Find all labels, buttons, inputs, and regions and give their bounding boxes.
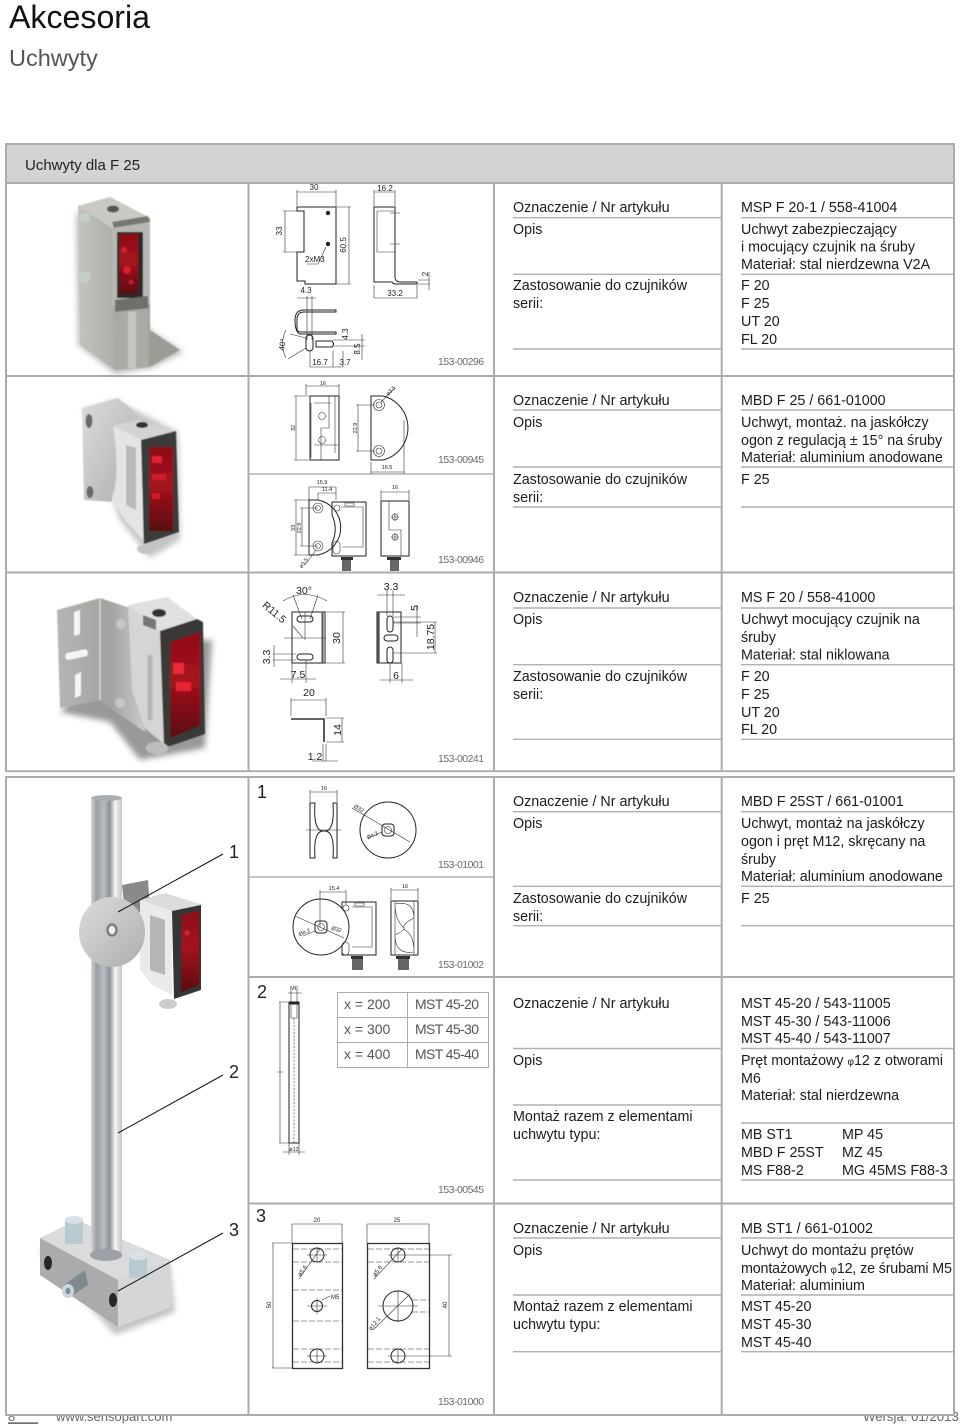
technical drawing 153-00296: 2xM3 [305, 255, 325, 264]
article number 153-00945: 153-00945 [438, 455, 484, 466]
technical drawing 153-00946: ø3.5 [299, 557, 310, 570]
details: MS F 20: Zastosowanie do czujników [513, 669, 688, 685]
technical drawing 153-01002: 16 [402, 884, 408, 890]
details: MSP F 20-1 [513, 200, 954, 349]
details: MBD F 25ST: F 25 [741, 891, 770, 907]
footer: 8 [8, 1409, 15, 1424]
article number 153-00296: 153-00296 [438, 357, 484, 368]
technical drawing 153-00241: 7.5 [291, 669, 305, 681]
technical drawing 153-01002: 15.4 [329, 886, 339, 892]
details: MS F 20: FL 20 [741, 722, 777, 738]
technical drawing 153-00545: rod: M6 [290, 986, 298, 992]
article number 153-01001: 153-01001 [438, 860, 484, 871]
details: MBD F 25ST: śruby [741, 852, 777, 868]
details: MSP F 20-1: Uchwyt zabezpieczający [741, 222, 898, 238]
technical drawing 153-00296: 8.5 [353, 343, 362, 355]
item number 1: 1 [257, 782, 267, 802]
item number 3: 3 [256, 1206, 266, 1226]
details: MST 45 rods: MB ST1 [741, 1127, 793, 1143]
technical drawing 153-01000: ø5.6 [372, 1264, 384, 1278]
details: MSP F 20-1: Opis [513, 222, 542, 238]
footer [8, 1409, 960, 1424]
details: MST 45 rods: Pręt montażowy φ12 z otworami [741, 1053, 943, 1069]
technical drawing 153-01000: M5 [331, 1295, 340, 1301]
technical drawing 153-00946: 11.4 [322, 487, 332, 493]
technical drawing 153-00296: 30 [310, 183, 319, 192]
technical drawing 153-01001: Ø4.2 [366, 831, 379, 841]
callout lines [118, 854, 223, 1291]
technical drawing 153-00241: 5 [409, 605, 421, 611]
details: MST 45 rods: Montaż razem z elementami [513, 1109, 693, 1125]
length table: x = 300 [344, 1021, 391, 1037]
details: MB ST1: uchwytu typu: [513, 1317, 600, 1333]
technical drawing 153-00945: 32 [291, 425, 297, 431]
details: MBD F 25 [513, 393, 954, 507]
length table: x = 400 [344, 1046, 391, 1062]
details: MBD F 25: MBD F 25 / 661-01000 [741, 393, 886, 409]
technical drawing 153-00296: 16.7 [312, 358, 328, 367]
technical drawing 153-00946: 22.9 [297, 523, 303, 533]
details: MST 45 rods: Oznaczenie / Nr artykułu [513, 996, 670, 1012]
details: MBD F 25: Opis [513, 415, 542, 431]
details: MSP F 20-1: Materiał: stal nierdzewna V2A [741, 257, 931, 273]
details: MS F 20 [513, 590, 954, 739]
technical drawing 153-01000: 50 [267, 1301, 273, 1308]
details: MST 45 rods: MST 45-20 / 543-11005 [741, 996, 891, 1012]
details: MB ST1: MST 45-40 [741, 1335, 812, 1351]
details: MS F 20: śruby [741, 630, 777, 646]
length table: x = 200 [344, 996, 391, 1012]
details: MS F 20: Opis [513, 612, 542, 628]
mounting rod [91, 797, 122, 1267]
technical drawing 153-00945 [291, 381, 408, 474]
details: MSP F 20-1: UT 20 [741, 314, 780, 330]
callout label 1: 1 [229, 842, 239, 862]
page title: Akcesoria [9, 0, 150, 35]
technical drawing 153-00241: 30 [331, 632, 343, 644]
callout label 2: 2 [229, 1062, 239, 1082]
clamp block [40, 1210, 172, 1327]
photo: safety bracket [76, 197, 184, 374]
technical drawing 153-00241: 18.75 [425, 624, 437, 650]
details: MB ST1: MB ST1 / 661-01002 [741, 1221, 873, 1237]
length table [338, 992, 488, 1068]
technical drawing 153-00946: 33 [291, 525, 297, 531]
technical drawing 153-00296: 40° [277, 338, 288, 351]
details: MB ST1: Opis [513, 1243, 542, 1259]
details: MSP F 20-1: Zastosowanie do czujników [513, 278, 688, 294]
technical drawing 153-00241: 20 [303, 687, 315, 699]
technical drawing 153-00945: 22.9 [353, 423, 359, 433]
technical drawing 153-00241: 30° [296, 585, 312, 597]
technical drawing 153-01000: 20 [314, 1218, 321, 1224]
block shadow [38, 1250, 175, 1335]
callout label 3: 3 [229, 1220, 239, 1240]
details: MBD F 25: serii: [513, 490, 543, 506]
length table: MST 45-20 [415, 996, 479, 1012]
details: MST 45 rods: MST 45-30 / 543-11006 [741, 1014, 891, 1030]
details: MS F 20: serii: [513, 687, 543, 703]
details: MB ST1: MST 45-30 [741, 1317, 812, 1333]
details: MBD F 25ST: Materiał: aluminium anodowane [741, 869, 943, 885]
technical drawing 153-01001: 16 [321, 786, 327, 792]
details: MS F 20: UT 20 [741, 705, 780, 721]
length table: MST 45-30 [415, 1021, 479, 1037]
details: MST 45 rods: MP 45 [842, 1127, 883, 1143]
details: MBD F 25: Materiał: aluminium anodowane [741, 450, 943, 466]
technical drawing 153-00945: 16 [320, 381, 326, 387]
technical drawing 153-00945: 16.5 [382, 465, 392, 471]
details: MB ST1 [513, 1221, 954, 1352]
details: MS F 20: Oznaczenie / Nr artykułu [513, 590, 670, 606]
details: MS F 20: Materiał: stal niklowana [741, 648, 890, 664]
details: MBD F 25ST: MBD F 25ST / 661-01001 [741, 794, 904, 810]
sensor [122, 880, 203, 1009]
details: MBD F 25ST: ogon i pręt M12, skręcany na [741, 834, 925, 850]
details: MB ST1: Oznaczenie / Nr artykułu [513, 1221, 670, 1237]
clamp disc [79, 897, 145, 967]
technical drawing 153-01000: 40 [443, 1301, 449, 1308]
details: MST 45 rods: Opis [513, 1053, 542, 1069]
article number 153-01002: 153-01002 [438, 960, 484, 971]
details: MBD F 25: ogon z regulacją ± 15° na śruby [741, 433, 943, 449]
details: MST 45 rods: MS F88-2 [741, 1163, 804, 1179]
details: MBD F 25: Oznaczenie / Nr artykułu [513, 393, 670, 409]
technical drawing 153-00296: 16.2 [377, 184, 393, 193]
details: MST 45 rods: MG 45MS F88-3 [842, 1163, 948, 1179]
details: MBD F 25: F 25 [741, 472, 770, 488]
technical drawing 153-00241: 14 [332, 724, 344, 736]
technical drawing 153-00946: 15.9 [317, 480, 327, 486]
article number 153-00545: 153-00545 [438, 1185, 484, 1196]
technical drawing 153-00296: 60.5 [339, 237, 348, 253]
details: MBD F 25ST: serii: [513, 909, 543, 925]
article number 153-00241: 153-00241 [438, 754, 484, 765]
section heading: Uchwyty dla F 25 [25, 157, 140, 174]
photo: dovetail bracket sensor [82, 398, 180, 558]
details: MST 45 rods: MST 45-40 / 543-11007 [741, 1031, 891, 1047]
technical drawing 153-00946: 16 [392, 485, 398, 491]
photo: nickel-plated bracket sensor [57, 597, 212, 760]
item number 2: 2 [257, 982, 267, 1002]
technical drawing 153-01000: 25 [394, 1218, 401, 1224]
details: MSP F 20-1: FL 20 [741, 332, 777, 348]
details: MBD F 25: Uchwyt, montaż. na jaskółczy [741, 415, 929, 431]
details: MST 45 rods: MBD F 25ST [741, 1145, 824, 1161]
technical drawing 153-00545: rod: ø12 [289, 1147, 299, 1153]
technical drawing 153-00296: 3.7 [339, 358, 351, 367]
technical drawing 153-01002: Ø32 [330, 926, 342, 934]
details: MSP F 20-1: F 20 [741, 278, 770, 294]
technical drawing 153-00545: rod [277, 986, 305, 1155]
details: MBD F 25ST: Uchwyt, montaż na jaskółczy [741, 816, 925, 832]
details: MBD F 25ST: Zastosowanie do czujników [513, 891, 688, 907]
details: MB ST1: Montaż razem z elementami [513, 1299, 693, 1315]
details: MS F 20: F 25 [741, 687, 770, 703]
details: MBD F 25ST: Opis [513, 816, 542, 832]
footer: www.sensopart.com [55, 1409, 172, 1424]
details: MBD F 25: Zastosowanie do czujników [513, 472, 688, 488]
technical drawing 153-00241: 6 [393, 670, 399, 682]
details: MBD F 25ST [513, 794, 954, 926]
technical drawing 153-00296 [275, 183, 430, 367]
technical drawing 153-00296: 33 [275, 226, 284, 235]
details: MS F 20: MS F 20 / 558-41000 [741, 590, 875, 606]
technical drawing 153-00241: 3.3 [261, 650, 273, 664]
technical drawing 153-00241: 3.3 [384, 581, 398, 593]
technical drawing 153-00945: ø3.5 [385, 385, 397, 397]
details: MB ST1: MST 45-20 [741, 1299, 812, 1315]
technical drawing 153-01000: ø12.1 [368, 1316, 383, 1332]
details: MS F 20: F 20 [741, 669, 770, 685]
technical drawing 153-01000 [267, 1218, 452, 1368]
page subtitle: Uchwyty [9, 45, 98, 71]
details: MB ST1: Materiał: aluminium [741, 1278, 865, 1294]
article number 153-01000: 153-01000 [438, 1397, 484, 1408]
details: MSP F 20-1: i mocujący czujnik na śruby [741, 240, 916, 256]
details: MST 45 rods: M6 [741, 1071, 761, 1087]
details: MB ST1: Uchwyt do montażu prętów [741, 1243, 914, 1259]
photo: rod assembly with sensor and clamp block [38, 795, 223, 1335]
details: MST 45 rods: uchwytu typu: [513, 1127, 600, 1143]
details: MSP F 20-1: F 25 [741, 296, 770, 312]
technical drawing 153-00241: 1.2 [308, 751, 322, 763]
technical drawing 153-00296: 33.2 [387, 289, 403, 298]
details: MSP F 20-1: Oznaczenie / Nr artykułu [513, 200, 670, 216]
technical drawing 153-00241 [260, 581, 437, 763]
technical drawing 153-01000: ø5.6 [297, 1264, 309, 1278]
technical drawing 153-00241: R11.5 [260, 599, 288, 626]
details: MBD F 25ST: Oznaczenie / Nr artykułu [513, 794, 670, 810]
length table: MST 45-40 [415, 1046, 479, 1062]
article number 153-00946: 153-00946 [438, 555, 484, 566]
technical drawing 153-01001: Ø32 [352, 804, 365, 814]
details: MST 45 rods: MZ 45 [842, 1145, 883, 1161]
details: MSP F 20-1: MSP F 20-1 / 558-41004 [741, 200, 897, 216]
technical drawing 153-01002 [293, 884, 418, 970]
details: MB ST1: montażowych φ12, ze śrubami M5 [741, 1261, 952, 1277]
footer: Wersja: 01/2013. [863, 1409, 960, 1424]
technical drawing 153-00946 [291, 480, 409, 571]
technical drawing 153-00296: 4.3 [300, 286, 312, 295]
details: MS F 20: Uchwyt mocujący czujnik na [741, 612, 920, 628]
technical drawing 153-01002: Ø4.2 [298, 928, 311, 938]
details: MST 45 rods: Materiał: stal nierdzewna [741, 1088, 899, 1104]
technical drawing 153-00296: 2 [421, 271, 430, 276]
technical drawing 153-00296: 4.3 [341, 328, 350, 340]
details: MST 45 rods [513, 996, 954, 1180]
details: MSP F 20-1: serii: [513, 296, 543, 312]
technical drawing 153-01001 [306, 786, 416, 858]
